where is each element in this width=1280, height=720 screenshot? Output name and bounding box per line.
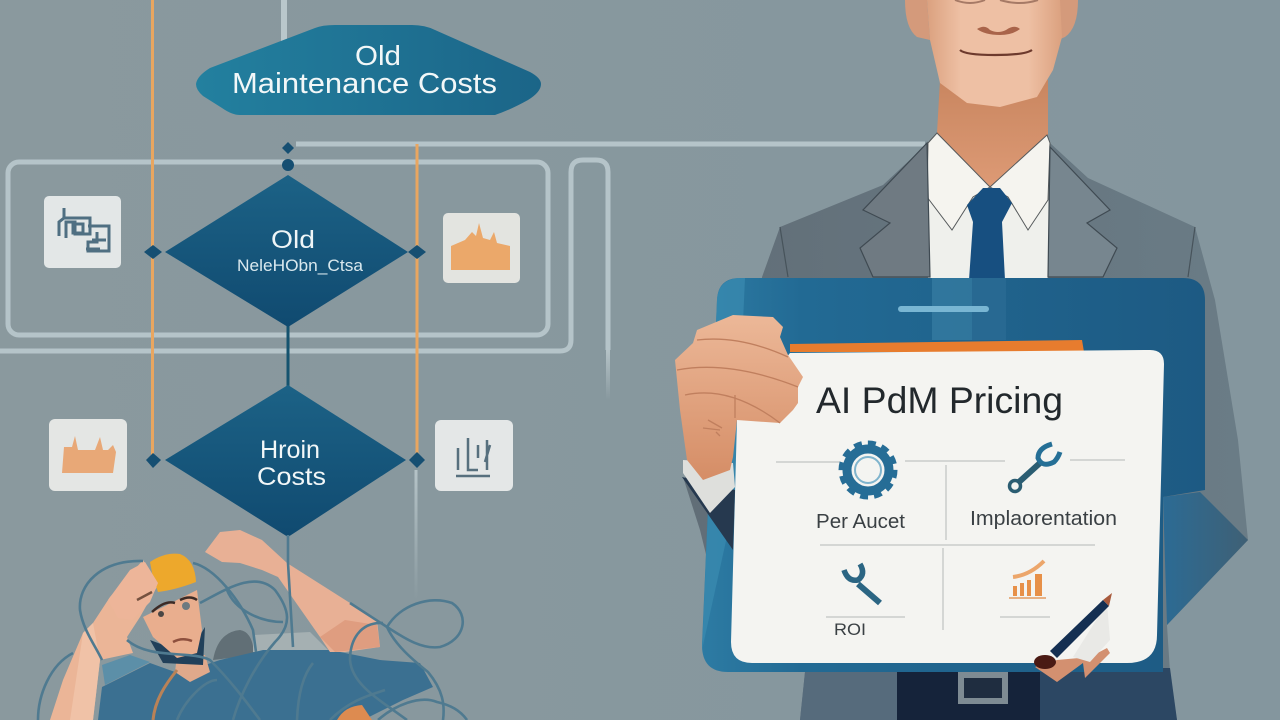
card title: AI PdM Pricing	[816, 380, 1063, 421]
connector nodes	[144, 142, 426, 468]
heading: Old Maintenance Costs: Maintenance Costs	[232, 68, 497, 100]
worker: fingers on head	[108, 562, 158, 620]
man: jacket lapels	[860, 143, 930, 277]
icon: wrench small	[844, 564, 880, 603]
man: right arm over panel	[1163, 492, 1248, 625]
man: necktie	[967, 188, 1012, 280]
pen and writing hand	[1034, 593, 1112, 682]
flowchart connector lines	[0, 0, 925, 600]
icon: wrench large	[1010, 444, 1060, 492]
orange strip behind card	[790, 340, 1084, 352]
worker: left arm and hand on head	[50, 560, 158, 720]
diamond: Old Maintenance Costs: NeleHObn_Ctsa	[237, 257, 364, 275]
confident man presenting	[684, 0, 1248, 720]
worker: tan cable	[153, 670, 177, 720]
blue tablet panel	[702, 278, 1205, 672]
shirt cuff	[683, 460, 735, 513]
diamond: Old Maintenance Costs: Old	[271, 226, 315, 254]
icon: factory orange	[443, 213, 520, 283]
man: ears	[905, 0, 1078, 40]
icon: gear	[841, 443, 895, 497]
diamond: Main Costs: Costs	[257, 463, 326, 491]
worker: face	[143, 590, 202, 658]
worker: chair and backdrop	[213, 630, 254, 660]
trousers and belt	[897, 668, 1040, 720]
man: head	[927, 0, 1062, 107]
hand holding card	[675, 315, 803, 550]
worker: neck	[175, 655, 210, 682]
man: suit jacket	[684, 143, 1248, 720]
diamond: Main Costs: Hroin	[260, 436, 320, 464]
icon: factory	[49, 419, 127, 491]
card grid lines	[776, 460, 1125, 630]
man: shirt	[928, 133, 1050, 280]
man: neck	[937, 80, 1048, 187]
label: ROI: ROI	[834, 620, 866, 639]
diamond: Main Costs	[165, 385, 406, 537]
worker: beard strap	[150, 627, 205, 665]
label: Per Asset: Per Aucet	[816, 511, 905, 533]
man: collar	[927, 133, 990, 230]
cables	[38, 535, 467, 720]
worker: orange item	[337, 705, 372, 720]
label: Implementation: Implaorentation	[970, 508, 1117, 530]
frustrated worker tangled in cables	[38, 530, 467, 720]
diamond: Old Maintenance Costs	[165, 175, 408, 327]
worker: shirt	[98, 650, 433, 720]
man: lower jacket right	[1040, 668, 1177, 720]
icon: machinery	[44, 196, 121, 268]
icon: tools	[435, 420, 513, 491]
heading: Old Maintenance Costs: Old	[355, 40, 401, 71]
sleeve	[682, 477, 735, 550]
icon: rising bar chart	[1009, 561, 1046, 599]
heading: Old Maintenance Costs	[196, 25, 541, 115]
pricing card	[731, 350, 1164, 663]
worker: raised forearm and hand	[205, 530, 380, 652]
hand	[675, 315, 803, 480]
worker: yellow hard hat	[150, 554, 196, 592]
